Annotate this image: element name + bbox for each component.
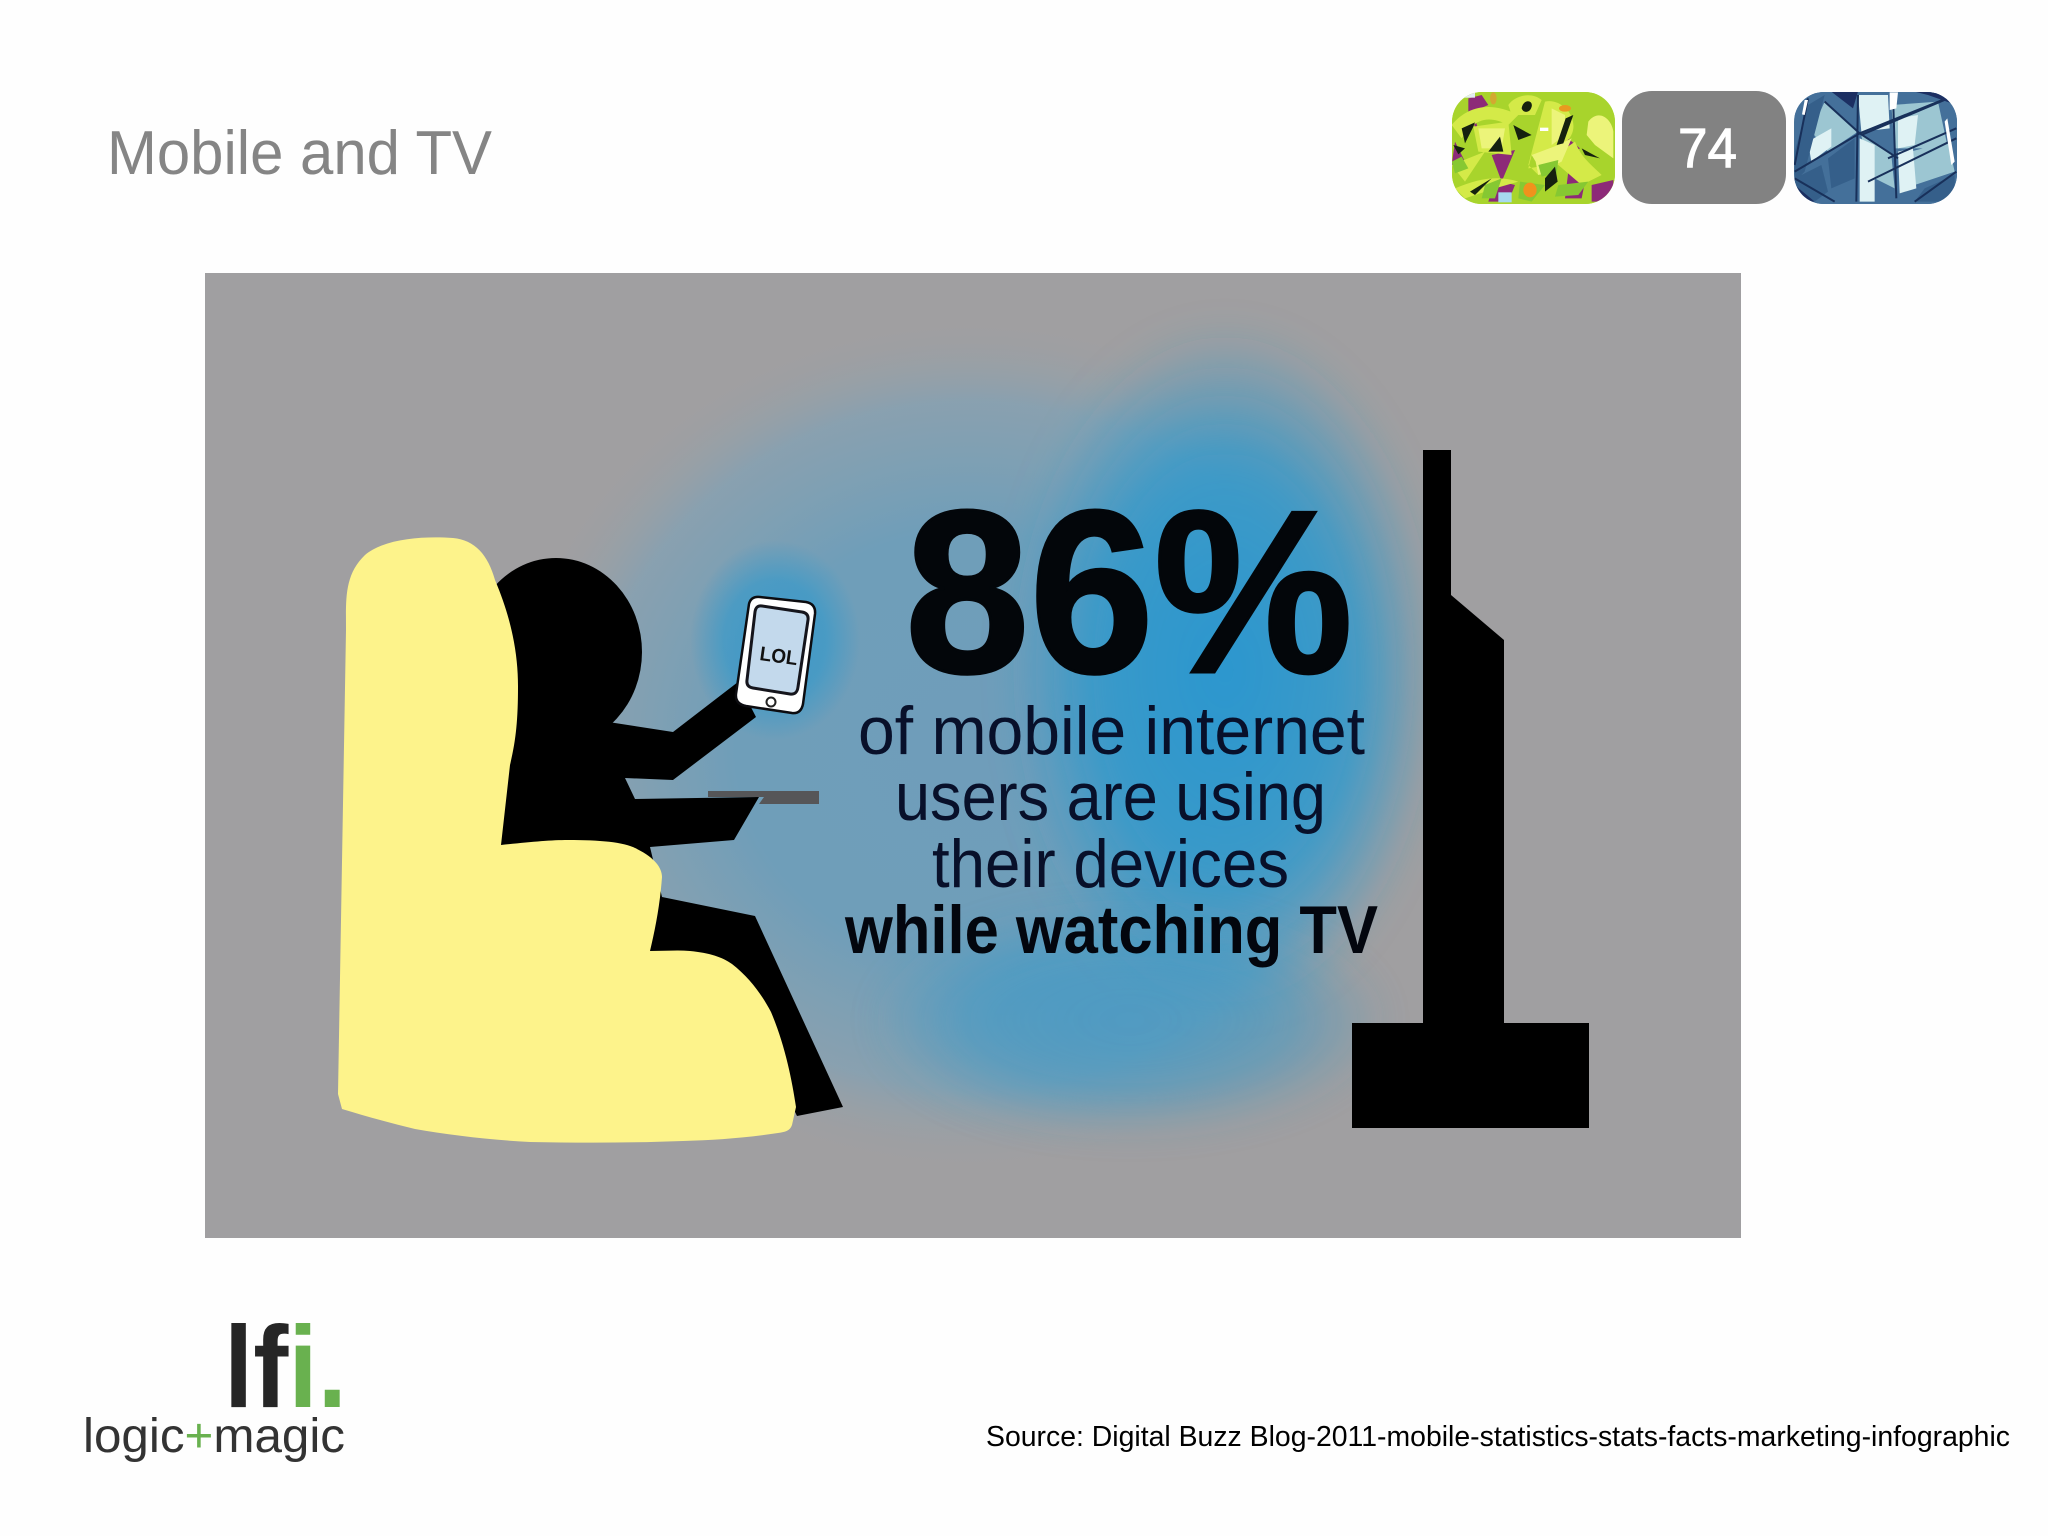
caption text: of mobile internet [858, 693, 1365, 769]
page number badge: 74 [1678, 116, 1737, 179]
statistic: 86%: 86% [905, 463, 1353, 722]
caption text [844, 693, 1378, 968]
page number badge [1622, 91, 1786, 204]
logo: lfi logic+magic: lfi. [224, 1302, 347, 1432]
television silhouette [1352, 450, 1589, 1128]
header thumbnails and page number [1452, 91, 1958, 205]
thumbnail: glass building [1794, 92, 1958, 205]
icon: smartphone showing LOL [736, 597, 815, 713]
panel: 86% mobile and TV illustration [205, 273, 1741, 1238]
logo: lfi logic+magic [83, 1302, 347, 1463]
panel background [205, 273, 1741, 1238]
title: Mobile and TV [107, 119, 493, 188]
armchair [338, 537, 796, 1143]
icon: smartphone showing LOL: LOL [758, 643, 799, 670]
caption text: their devices [932, 826, 1289, 902]
person silhouette [470, 558, 843, 1116]
logo: lfi logic+magic: logic+magic [83, 1410, 345, 1463]
thumbnail: graffiti [1452, 92, 1615, 205]
tray table [708, 791, 819, 804]
blue glow from television [602, 330, 1423, 1140]
source citation: Source: Digital Buzz Blog-2011-mobile-statistics-stats-facts-marketing-infographic [986, 1421, 2010, 1453]
caption text: users are using [895, 759, 1326, 835]
caption text: while watching TV [844, 892, 1378, 968]
